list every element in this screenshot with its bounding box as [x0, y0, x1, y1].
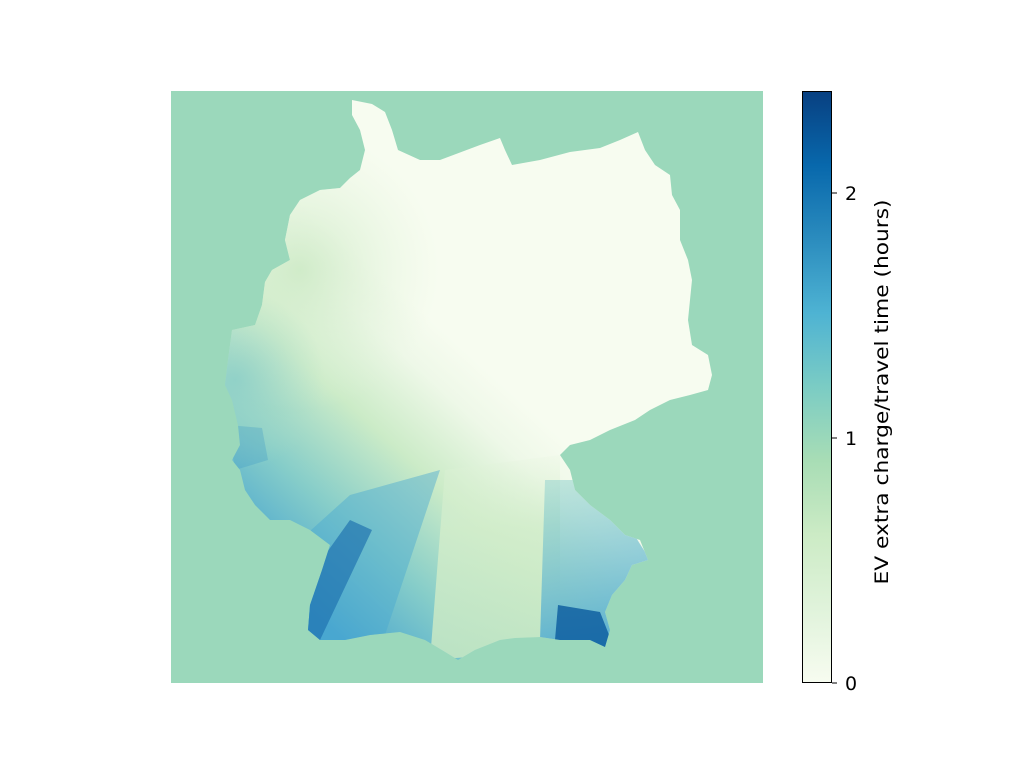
map panel: [171, 91, 763, 683]
tick labels: 2: [845, 183, 857, 205]
tick labels: 0: [845, 673, 857, 695]
tick labels: 1: [845, 428, 857, 450]
colorbar: [802, 92, 893, 695]
colorbar ticks: [832, 193, 837, 683]
map: Germany heatmap: [225, 100, 712, 660]
colorbar label: EV extra charge/travel time (hours): [871, 200, 893, 584]
tick labels: [845, 183, 857, 695]
